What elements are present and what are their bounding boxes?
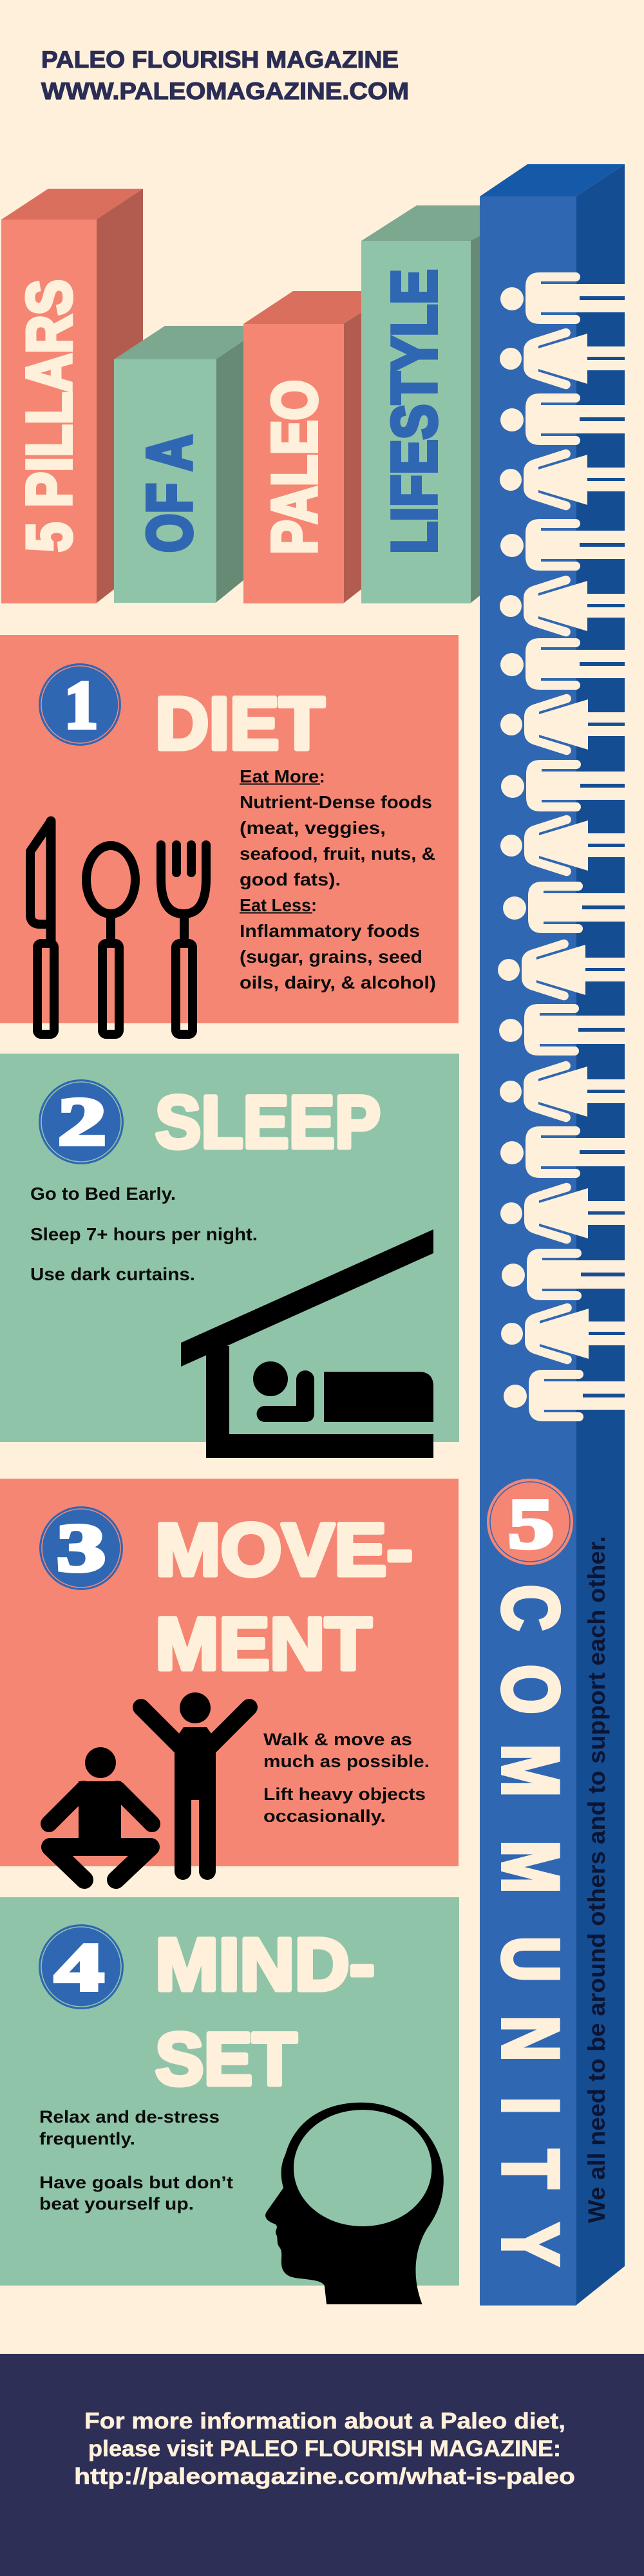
- text: mindset tips: frequently.: [39, 2129, 135, 2148]
- icon: row of people: [498, 272, 625, 1421]
- heading: mindset: MIND-: [155, 1924, 375, 2006]
- badge: number 2: [39, 1079, 124, 1164]
- footer text: For more information about a Paleo diet,: [84, 2409, 565, 2434]
- text: sleep tips: [30, 1184, 258, 1284]
- heading: movement: MENT: [155, 1603, 372, 1685]
- badge: number 4: 4: [55, 1929, 104, 2005]
- text: movement tips: Walk & move as: [263, 1730, 412, 1749]
- text: mindset tips: beat yourself up.: [39, 2194, 194, 2213]
- text: eat more and eat less: (sugar, grains, seed: [240, 947, 422, 967]
- pillar: lifestyle: [361, 205, 480, 603]
- heading: diet: DIET: [155, 683, 325, 765]
- badge: number 4: [39, 1924, 124, 2009]
- panel: movement: [0, 1479, 459, 1880]
- text: mindset tips: [39, 2107, 233, 2213]
- text: eat more and eat less: Nutrient-Dense foods: [240, 792, 432, 812]
- text: eat more and eat less: Eat More:: [240, 766, 325, 786]
- icon: squatting figure: [49, 1747, 152, 1880]
- text: eat more and eat less: (meat, veggies,: [240, 818, 386, 838]
- pillar: community: [480, 164, 625, 2306]
- heading: mindset: [155, 1924, 375, 2101]
- text: eat more and eat less: oils, dairy, & alcohol): [240, 972, 436, 992]
- pillar: of a: [114, 326, 243, 603]
- text: mindset tips: Relax and de-stress: [39, 2107, 220, 2126]
- badge: number 5: 5: [508, 1484, 554, 1563]
- heading: movement: [155, 1509, 413, 1685]
- heading: community, vertical: COMMUNITY: [486, 1585, 576, 2266]
- text: movement tips: [263, 1730, 430, 1826]
- icon: knife, spoon and fork: [30, 821, 206, 1034]
- pillar: of a: OF A: [134, 435, 205, 553]
- text: eat more and eat less: Eat Less:: [240, 895, 317, 915]
- icon: head silhouette: [265, 2103, 444, 2304]
- header: magazine name and website: PALEO FLOURISH MAGAZINE: [41, 46, 399, 73]
- pillar: 5 pillars: [1, 189, 143, 603]
- panel: mindset: [0, 1897, 459, 2304]
- icon: person sleeping under roof: [181, 1229, 433, 1458]
- footer text: please visit PALEO FLOURISH MAGAZINE:: [88, 2436, 561, 2461]
- heading: movement: MOVE-: [155, 1509, 413, 1591]
- badge: number 2: 2: [58, 1084, 106, 1159]
- footer text: [74, 2409, 575, 2489]
- text: movement tips: much as possible.: [263, 1752, 430, 1771]
- pillar: lifestyle: LIFESTYLE: [379, 269, 450, 554]
- badge: number 3: 3: [57, 1510, 106, 1586]
- pillar: 5 pillars: 5 PILLARS: [14, 279, 84, 552]
- text: mindset tips: Have goals but don’t: [39, 2173, 233, 2192]
- icon: standing figure with raised arms: [141, 1692, 249, 1880]
- text: eat more and eat less: seafood, fruit, nuts, &: [240, 844, 435, 864]
- heading: mindset: SET: [155, 2018, 297, 2101]
- text: eat more and eat less: Inflammatory foods: [240, 921, 420, 941]
- badge: number 1: 1: [64, 667, 98, 743]
- text: movement tips: occasionally.: [263, 1806, 386, 1826]
- header: magazine name and website: WWW.PALEOMAGAZINE.COM: [41, 78, 409, 104]
- panel: diet: [0, 635, 459, 1034]
- text: movement tips: Lift heavy objects: [263, 1785, 426, 1804]
- badge: number 5: [487, 1479, 573, 1565]
- text: sleep tips: Go to Bed Early.: [30, 1184, 176, 1204]
- text: eat more and eat less: [240, 766, 436, 992]
- header: magazine name and website: [41, 46, 409, 104]
- heading: sleep: SLEEP: [155, 1081, 381, 1164]
- badge: number 3: [39, 1506, 123, 1590]
- text: community description, vertical: We all need to be around others and to support each other.: [583, 1536, 610, 2223]
- badge: number 1: [39, 663, 121, 746]
- footer text: http://paleomagazine.com/what-is-paleo: [74, 2464, 575, 2489]
- text: sleep tips: Sleep 7+ hours per night.: [30, 1224, 258, 1244]
- text: eat more and eat less: good fats).: [240, 869, 341, 889]
- panel: sleep: [0, 1054, 459, 1458]
- footer band: [0, 2354, 644, 2576]
- text: sleep tips: Use dark curtains.: [30, 1264, 195, 1284]
- pillar: paleo: PALEO: [259, 380, 330, 554]
- pillar: paleo: [243, 291, 361, 603]
